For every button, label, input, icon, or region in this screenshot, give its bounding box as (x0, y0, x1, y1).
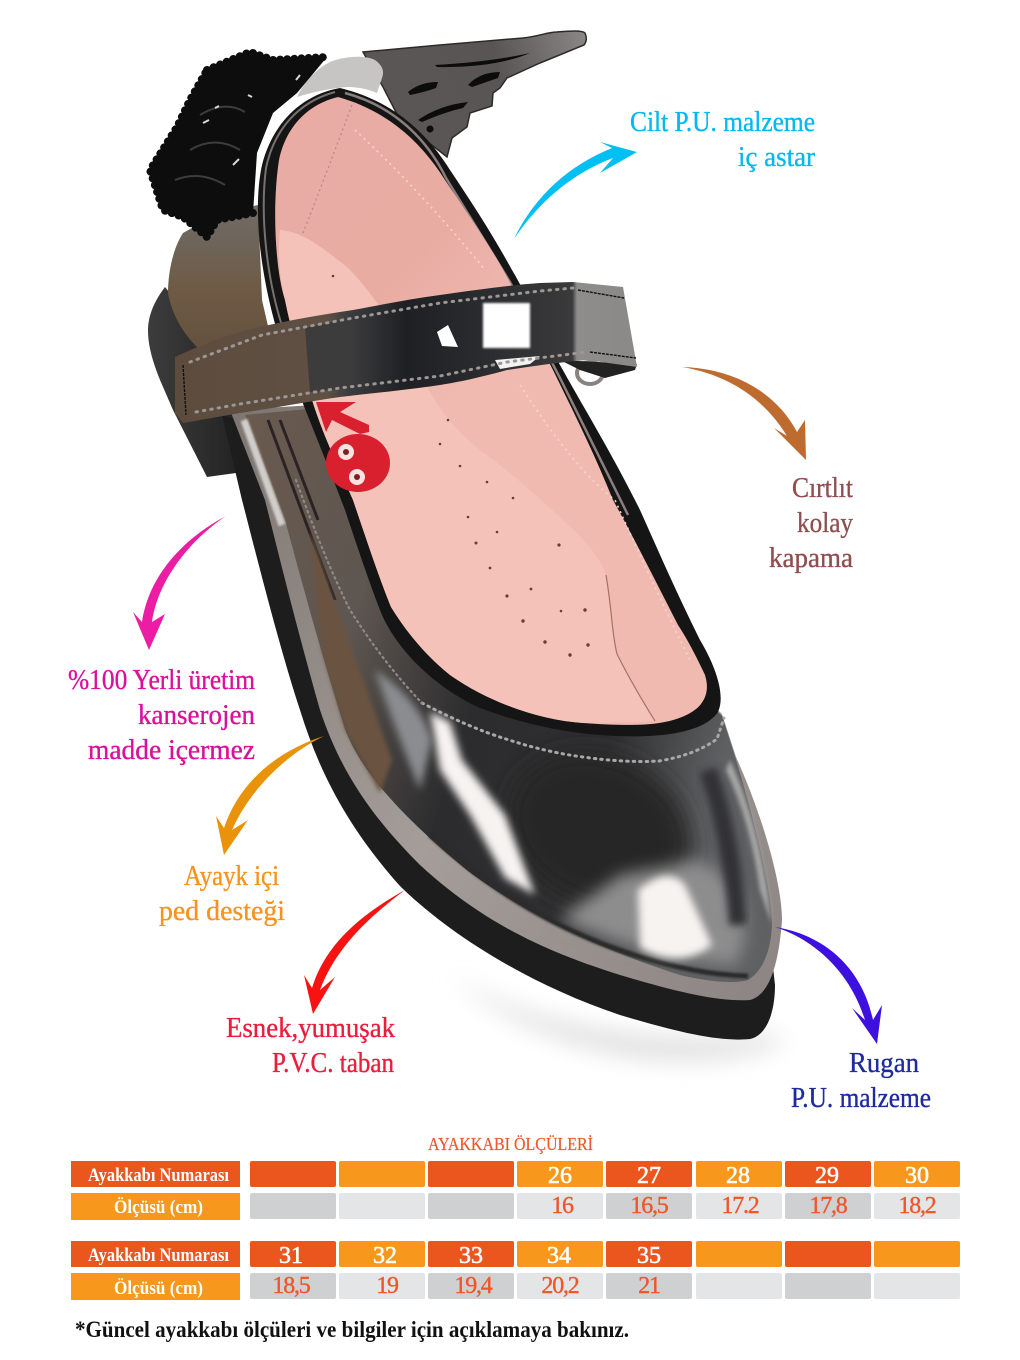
strap reflection lower (495, 356, 540, 369)
size row 2 numbers: 34 (547, 1243, 571, 1269)
measure row 1 values: 16,5 (630, 1193, 669, 1219)
rim left silver edge (264, 92, 335, 335)
label: insole support: ped desteği (159, 896, 285, 927)
measure row 2 values: 19 (376, 1273, 399, 1299)
toe lower dark edge (430, 835, 748, 976)
measure row 2 values (272, 1273, 660, 1299)
row labels: Ölçüsü (cm) (114, 1197, 203, 1218)
measure row 1 values: 17,8 (809, 1193, 848, 1219)
velcro pad (297, 57, 383, 97)
label: sole: Esnek,yumuşak (226, 1013, 395, 1044)
label: velcro: Cırtlıt (792, 473, 853, 504)
vamp upper body (245, 400, 772, 982)
heel block (148, 287, 262, 477)
rim silver edge (345, 93, 628, 515)
lining wall (275, 97, 707, 725)
arrow: cyan (514, 142, 637, 239)
size row 2 numbers: 35 (637, 1243, 661, 1269)
callout: local production (68, 516, 255, 766)
label: local production: %100 Yerli üretim (68, 665, 255, 696)
highlight streak: vamp left (430, 712, 535, 895)
toe grey sheen (560, 860, 745, 965)
label: lining: iç astar (738, 142, 816, 173)
size row 2 numbers: 31 (279, 1243, 303, 1269)
size row 2 numbers: 32 (373, 1243, 397, 1269)
measure row 1 values: 17.2 (721, 1193, 759, 1219)
size row 1 numbers: 29 (815, 1163, 839, 1189)
dark side stripes (268, 420, 335, 600)
metallic rand band (230, 400, 782, 1000)
toe right dark panel (708, 770, 738, 925)
label: lining: Cilt P.U. malzeme (630, 107, 815, 138)
label: velcro: kolay (797, 508, 853, 539)
arrow: red (304, 890, 405, 1014)
callout: lining (514, 107, 816, 239)
flower specular (203, 75, 300, 165)
measure row 2 values: 20,2 (541, 1273, 579, 1299)
label: local production: kanserojen (138, 700, 255, 731)
callout: insole support (159, 736, 324, 927)
black sequin flower (150, 52, 327, 237)
table title: AYAKKABI ÖLÇÜLERİ (428, 1134, 593, 1154)
highlight: vamp side (375, 670, 432, 790)
label: sole: P.V.C. taban (272, 1048, 394, 1079)
arrow: magenta (133, 516, 226, 650)
size row 1 (250, 1161, 960, 1187)
buckle ring (560, 360, 637, 384)
callout: patent material (775, 927, 931, 1114)
flower highlights (175, 107, 245, 185)
velcro strap (175, 282, 637, 423)
strap reflection small (437, 325, 458, 347)
insole (279, 230, 655, 723)
size table (71, 1134, 960, 1300)
lining stitching (355, 130, 690, 660)
size row 1 numbers: 28 (726, 1163, 750, 1189)
size row 1 numbers: 26 (548, 1163, 572, 1189)
heel quarter (168, 205, 285, 400)
perforation holes (332, 275, 590, 657)
label: velcro: kapama (769, 543, 854, 574)
size row 1 numbers: 27 (637, 1163, 661, 1189)
lining seam (303, 105, 352, 233)
arrow: orange (216, 736, 324, 855)
callout: sole (226, 890, 405, 1079)
brown quarter reflection (310, 530, 392, 793)
size row 1 numbers: 30 (905, 1163, 929, 1189)
side stitching (296, 480, 422, 703)
row labels: Ölçüsü (cm) (114, 1278, 203, 1299)
measure row 2 values: 19,4 (454, 1273, 493, 1299)
product photo: shoe (148, 31, 785, 1059)
insole edge crease (606, 575, 655, 721)
highlight: toe tip (638, 876, 712, 958)
silver side stripe (244, 420, 282, 525)
ground shadow (450, 975, 785, 1059)
label: insole support: Ayayk içi (184, 861, 279, 892)
label: local production: madde içermez (88, 735, 255, 766)
arrow: brown (682, 367, 806, 460)
size row 2 numbers: 33 (459, 1243, 483, 1269)
footnote: *Güncel ayakkabı ölçüleri ve bilgiler için açıklamaya bakınız. (75, 1317, 629, 1342)
measure row 2 values: 18,5 (272, 1273, 311, 1299)
row labels: Ayakkabı Numarası (88, 1165, 229, 1186)
black rim of opening (258, 88, 721, 736)
vamp stitching (422, 703, 724, 762)
size row 1 numbers (548, 1163, 929, 1189)
measure row 1 (250, 1193, 960, 1219)
callout: velcro (682, 367, 854, 574)
strap reflection grey (305, 318, 352, 392)
size row 2 numbers (279, 1243, 661, 1269)
strap stitching bottom (196, 352, 587, 412)
measure row 1 values (551, 1193, 936, 1219)
size row 2 (250, 1241, 960, 1267)
strap stitching top (190, 288, 573, 362)
highlight: toe right rim (726, 760, 772, 925)
outsole (222, 415, 775, 1040)
measure row 2 values: 21 (638, 1273, 660, 1299)
label: patent material: P.U. malzeme (791, 1083, 931, 1114)
row labels (71, 1161, 240, 1300)
flower scalloped edge (150, 52, 327, 237)
brand logo (316, 402, 390, 492)
wing ornament (363, 31, 586, 157)
row labels: Ayakkabı Numarası (88, 1245, 229, 1266)
measure row 1 values: 18,2 (898, 1193, 936, 1219)
strap tab stitching (183, 290, 636, 415)
arrow: blue (775, 927, 882, 1044)
label: patent material: Rugan (849, 1048, 919, 1079)
measure row 2 (250, 1273, 960, 1299)
wing lower hole (426, 126, 434, 132)
strap reflection (483, 303, 530, 348)
measure row 1 values: 16 (551, 1193, 574, 1219)
toe dark zone (482, 722, 718, 938)
